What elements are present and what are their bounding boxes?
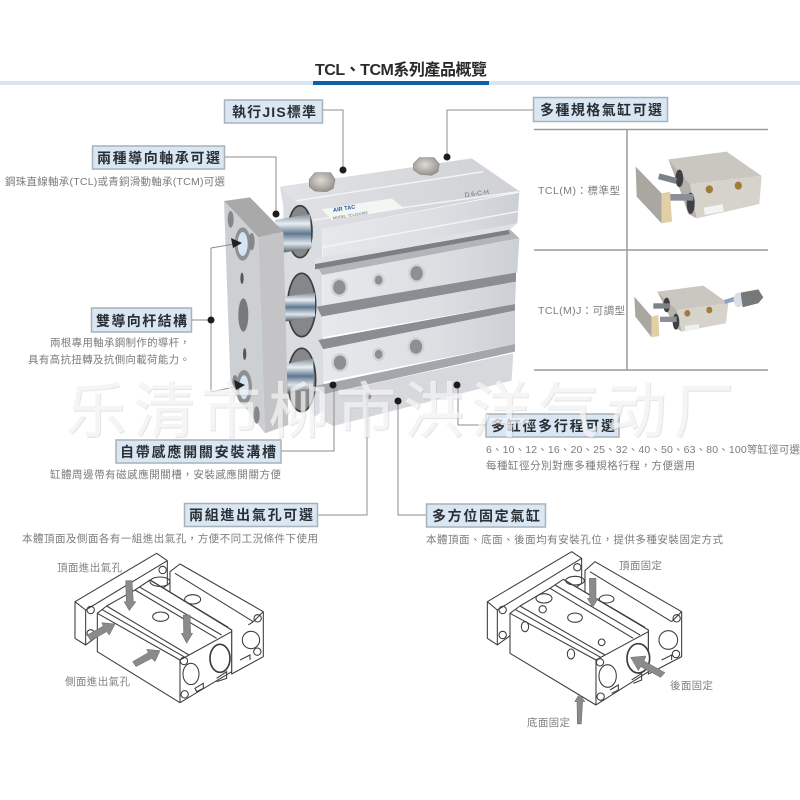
bore and stroke description: 6、10、12、16、20、25、32、40、50、63、80、100等缸徑可選 bbox=[486, 443, 800, 456]
bolts bbox=[309, 158, 439, 192]
cylinder top ribs bbox=[297, 172, 519, 247]
watermark: 乐清市柳市洪洋气动厂 bbox=[66, 378, 741, 445]
dual guide rod description: 兩根專用軸承鋼制作的導杆， bbox=[50, 336, 190, 349]
label: two bearing types: 兩種導向軸承可選 bbox=[97, 150, 220, 166]
product photo: standard bbox=[636, 152, 762, 223]
label: sensor groove bbox=[116, 440, 281, 463]
label: JIS standard: 執行JIS標準 bbox=[232, 104, 316, 120]
label: multi-direction mounting bbox=[426, 504, 546, 527]
middle groove bbox=[317, 273, 516, 317]
bottom band bbox=[325, 353, 513, 426]
model marking: D.6-C-H bbox=[464, 189, 490, 199]
mounting description: 本體頂面、底面、後面均有安裝孔位，提供多種安裝固定方式 bbox=[426, 533, 724, 546]
port holes bbox=[332, 265, 424, 371]
rod openings bbox=[288, 206, 316, 412]
cylinder main block bbox=[97, 580, 232, 703]
row label: standard: TCL(M)：標準型 bbox=[538, 184, 620, 197]
bearing description: 鋼珠直線軸承(TCL)或青銅滑動軸承(TCM)可選 bbox=[5, 175, 226, 188]
caption: top ports: 頂面進出氣孔 bbox=[57, 561, 122, 574]
guide rods bbox=[275, 214, 312, 253]
label: two port groups bbox=[184, 504, 318, 526]
diagram: mounting directions bbox=[487, 552, 682, 724]
lower groove bbox=[318, 304, 515, 349]
dual guide rod description: 具有高抗扭轉及抗側向載荷能力。 bbox=[28, 353, 190, 366]
cylinder top face bbox=[280, 158, 520, 229]
label: dual guide rod: 雙導向杆結構 bbox=[96, 313, 187, 329]
cylinder rear block bbox=[585, 562, 682, 674]
sensor groove description: 缸體周邊帶有磁感應開關槽，安裝感應開關方便 bbox=[50, 468, 282, 481]
nameplate bbox=[322, 198, 404, 220]
diagram: port locations bbox=[75, 553, 263, 703]
lower ported band bbox=[323, 311, 515, 382]
label: sensor groove: 自帶感應開關安裝溝槽 bbox=[120, 444, 276, 460]
middle band bbox=[322, 282, 516, 337]
label: dual guide rod bbox=[92, 308, 192, 332]
label: multiple bores and strokes: 多缸徑多行程可選 bbox=[491, 418, 615, 434]
label: multiple bores and strokes bbox=[486, 414, 619, 437]
label: cylinder variants: 多種規格氣缸可選 bbox=[540, 102, 662, 118]
nameplate: AIR TAC bbox=[333, 205, 356, 214]
row label: adjustable: TCL(M)J：可調型 bbox=[538, 304, 625, 317]
bore and stroke description: 每種缸徑分別對應多種規格行程，方便選用 bbox=[486, 459, 695, 472]
main cylinder photo bbox=[224, 158, 520, 433]
arrows bbox=[87, 581, 193, 667]
port groups description: 本體頂面及側面各有一組進出氣孔，方便不同工況條件下使用 bbox=[22, 532, 318, 545]
caption: side ports: 側面進出氣孔 bbox=[65, 675, 130, 688]
end plate bbox=[224, 197, 288, 433]
variants table bbox=[534, 129, 768, 370]
caption: top mounting: 頂面固定 bbox=[619, 559, 662, 572]
label: multi-direction mounting: 多方位固定氣缸 bbox=[432, 508, 540, 524]
watermark: 乐清市柳市洪洋气动厂 bbox=[67, 379, 742, 446]
upper body band bbox=[322, 193, 519, 259]
cylinder end face bbox=[280, 187, 324, 417]
leader lines and dots bbox=[192, 110, 533, 515]
cylinder rear block bbox=[170, 564, 263, 674]
product photo: adjustable bbox=[634, 286, 763, 337]
bore and stroke description bbox=[486, 443, 800, 472]
header rule bbox=[0, 81, 800, 85]
bottom groove bbox=[315, 344, 515, 394]
mounting plate bbox=[75, 553, 167, 645]
label: JIS standard bbox=[224, 100, 322, 123]
title: TCL、TCM系列產品概覽 bbox=[315, 60, 487, 79]
mounting plate bbox=[487, 552, 582, 645]
cylinder main block bbox=[510, 579, 648, 705]
ported band bbox=[323, 238, 519, 306]
arrows bbox=[575, 578, 665, 724]
upper groove bbox=[315, 229, 519, 275]
dual guide rod description bbox=[28, 336, 190, 366]
caption: bottom mounting: 底面固定 bbox=[527, 716, 570, 729]
nameplate: MODEL: TCL25X30S bbox=[333, 211, 368, 220]
caption: rear mounting: 後面固定 bbox=[670, 679, 714, 692]
label: cylinder variants bbox=[534, 98, 668, 122]
label: two port groups: 兩組進出氣孔可選 bbox=[189, 507, 313, 523]
label: two bearing types bbox=[92, 146, 224, 169]
